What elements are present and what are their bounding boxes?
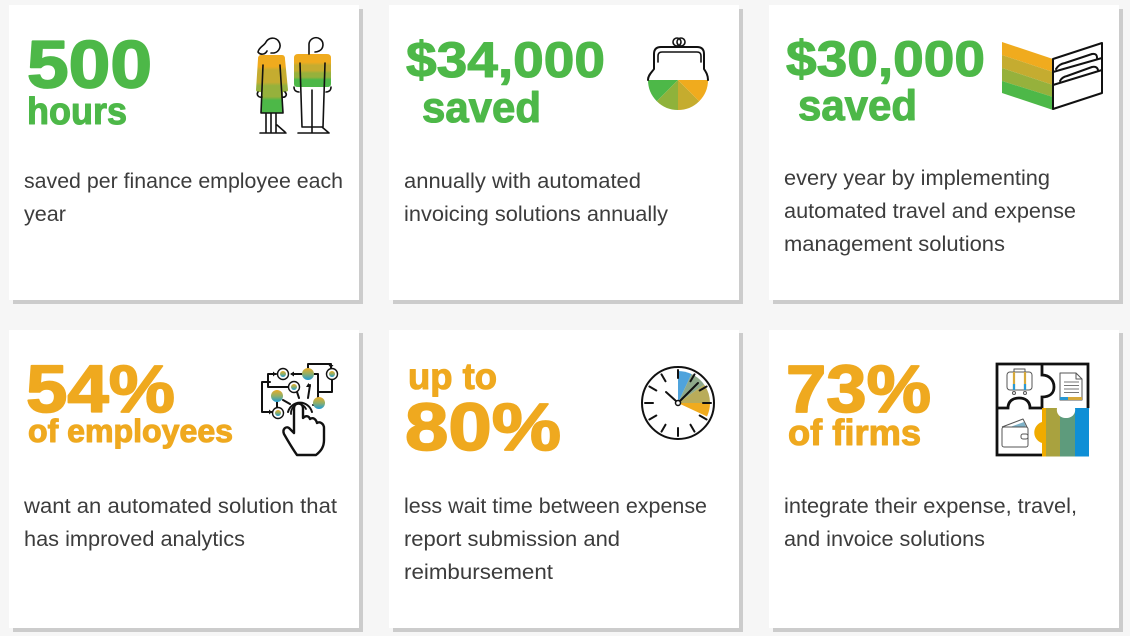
body text <box>404 170 669 226</box>
body text: year <box>24 203 66 226</box>
panel: up to 80% <box>389 330 743 632</box>
icon: clock <box>642 367 714 439</box>
body text: reimbursement <box>404 561 553 584</box>
body text <box>784 495 1077 551</box>
heading: 80%: 80% <box>405 390 561 465</box>
body text <box>404 495 707 584</box>
icon: two people <box>256 38 331 133</box>
heading: $30,000: $30,000 <box>786 31 985 87</box>
body text: saved per finance employee each <box>24 170 343 193</box>
heading: up to: up to <box>408 356 497 397</box>
panel: 73% of firms <box>769 330 1123 632</box>
body text <box>23 495 337 551</box>
icon: hand on workflow <box>262 364 338 455</box>
body text: report submission and <box>404 528 620 551</box>
body text: less wait time between expense <box>404 495 707 518</box>
heading: hours: hours <box>27 91 127 133</box>
body text: and invoice solutions <box>784 528 985 551</box>
icon: open wallet <box>1002 42 1102 110</box>
panel: $30,000 saved travel <box>769 5 1123 304</box>
body text: integrate their expense, travel, <box>784 495 1077 518</box>
icon: coin purse <box>648 38 708 110</box>
icon: puzzle <box>997 364 1089 456</box>
body text: has improved analytics <box>24 528 245 551</box>
heading: 54%: 54% <box>26 352 175 427</box>
heading: saved: saved <box>798 82 917 130</box>
body text: want an automated solution that <box>23 495 337 518</box>
panel: 54% of employees <box>9 330 363 632</box>
heading: $34,000: $34,000 <box>406 32 605 88</box>
panel: 500 hours <box>9 5 363 304</box>
body text <box>784 167 1076 256</box>
body text <box>24 170 343 226</box>
body text: invoicing solutions annually <box>404 203 669 226</box>
body text: annually with automated <box>404 170 641 193</box>
body text: management solutions <box>784 233 1005 256</box>
heading: of employees: of employees <box>28 413 233 449</box>
heading: 500: 500 <box>27 28 152 102</box>
heading: 73%: 73% <box>786 352 931 427</box>
heading: saved: saved <box>422 84 541 132</box>
body text: every year by implementing <box>784 167 1050 190</box>
heading: of firms: of firms <box>788 412 921 453</box>
panel: $34,000 saved invoicing <box>389 5 743 304</box>
body text: automated travel and expense <box>784 200 1076 223</box>
